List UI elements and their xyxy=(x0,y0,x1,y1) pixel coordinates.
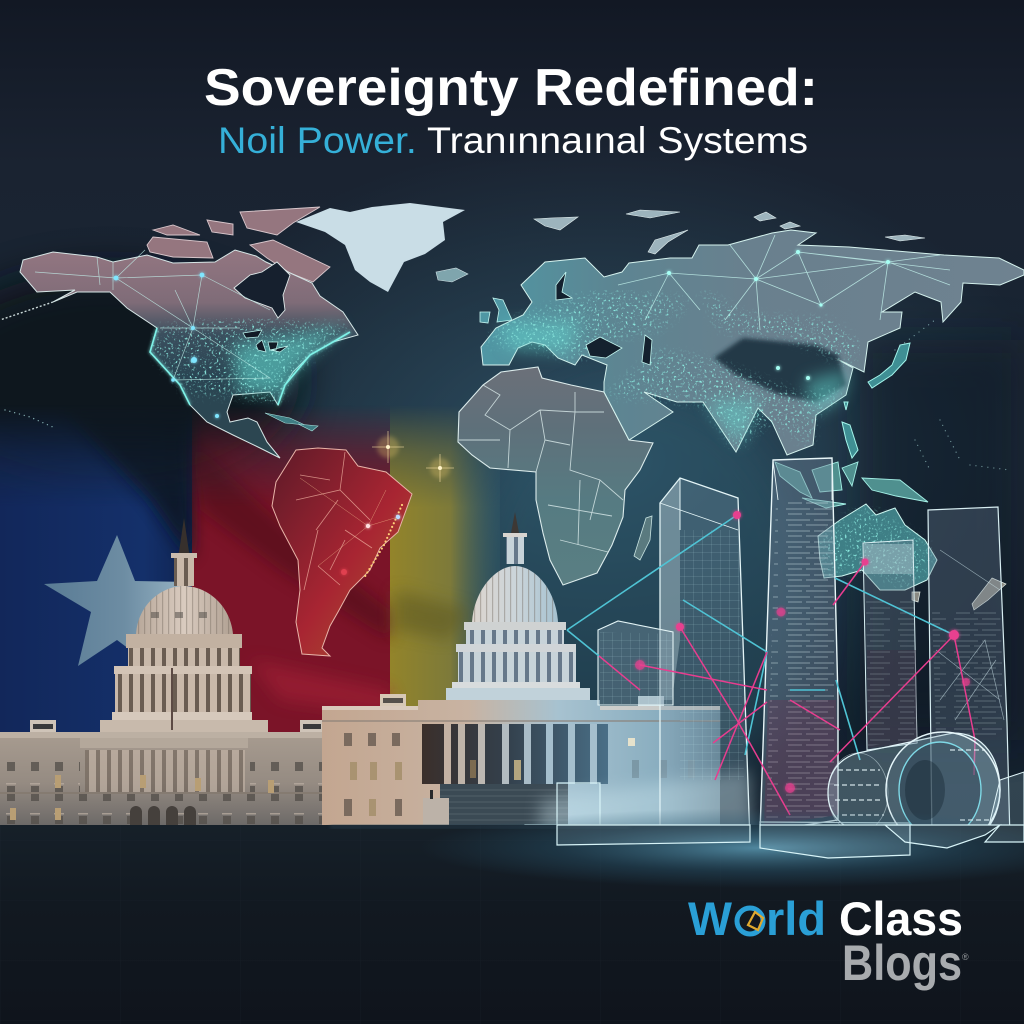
map: South America borders and lights xyxy=(296,452,402,590)
tower: short left xyxy=(598,621,673,705)
map: North America nodes xyxy=(114,273,219,418)
map: Australia xyxy=(818,504,937,590)
right capitol drum xyxy=(446,622,590,702)
map: North American coast glow xyxy=(150,328,350,405)
logo icon: ring with knot xyxy=(737,908,763,934)
title line 1: Sovereignty Redefined: xyxy=(204,59,818,117)
tower: rear centre xyxy=(863,540,917,750)
title line 2: Noil Power. Tranınnaınal Systems xyxy=(218,120,808,161)
roof pavilion xyxy=(380,694,664,706)
map: Greenland xyxy=(296,203,465,292)
left wing arches xyxy=(130,806,196,825)
right capitol statue xyxy=(508,512,522,536)
map: North America city lights xyxy=(150,318,350,405)
left capitol statue xyxy=(176,518,192,556)
map: Japan and Philippines xyxy=(842,343,910,458)
map: Africa xyxy=(458,367,653,585)
map: North America network xyxy=(35,250,270,380)
right capitol lantern xyxy=(503,533,527,564)
map: Eurasia xyxy=(481,230,1024,455)
map: Eurasia network xyxy=(618,235,950,330)
map: Hawaii island dots xyxy=(5,410,55,428)
far right glass cylinder xyxy=(985,772,1024,842)
map: US east glow xyxy=(232,325,345,395)
left capitol dome xyxy=(136,586,233,634)
map: Africa country borders xyxy=(459,385,623,552)
flag star xyxy=(44,535,182,666)
map: Aleutian chain xyxy=(0,302,53,320)
map: Eurasia nodes xyxy=(667,250,890,380)
map: Hudson Bay xyxy=(234,262,290,318)
lower hologram haze xyxy=(540,770,755,846)
map: South America sparkles xyxy=(341,431,454,575)
logo word: rld: rld xyxy=(766,892,826,945)
map: UK and Ireland xyxy=(480,298,512,323)
network lines: cyan xyxy=(567,515,954,760)
right wing body xyxy=(322,700,720,825)
left capitol flag pole xyxy=(171,668,173,730)
glass bases over floor xyxy=(557,825,1024,858)
map: Tibet dark region xyxy=(714,338,846,402)
map: North America xyxy=(20,250,358,458)
base glow xyxy=(530,834,1024,846)
map: Madagascar xyxy=(634,516,652,560)
holographic glass towers xyxy=(525,458,1024,858)
map: New Zealand and Tasmania xyxy=(912,578,1006,610)
logo word: W: W xyxy=(688,892,733,945)
flag: blue field xyxy=(0,405,192,740)
map: Caribbean islands xyxy=(265,413,318,431)
glass cylinder xyxy=(828,732,1000,848)
floor xyxy=(0,808,1024,1024)
logo registered mark: ® xyxy=(962,952,969,962)
network nodes xyxy=(635,511,970,793)
map: Canadian arctic islands xyxy=(147,207,330,282)
map: Australia city lights xyxy=(820,506,935,588)
title xyxy=(204,59,818,161)
capitol building: right wing and dome xyxy=(322,512,720,825)
front steps xyxy=(423,784,568,825)
tower: rear right with map overlay xyxy=(928,507,1010,840)
flag backdrop xyxy=(0,405,500,740)
small roof pavilions xyxy=(30,720,324,732)
tower: tall centre with data xyxy=(760,458,838,832)
flag: red band xyxy=(192,405,390,740)
right capitol dome xyxy=(472,566,558,622)
map: Iceland xyxy=(436,268,468,282)
network lines: magenta xyxy=(599,562,975,815)
map: Baltic, Black and Caspian seas xyxy=(556,272,652,365)
glass base box centre xyxy=(760,822,910,858)
right wing windows xyxy=(344,733,695,816)
left wing body xyxy=(0,732,326,825)
left wing lit windows xyxy=(10,775,274,820)
flag: yellow band xyxy=(390,412,498,706)
flag: shadow folds xyxy=(82,418,468,708)
logo: World Class Blogs xyxy=(688,892,969,991)
glass base boxes left xyxy=(525,783,750,845)
logo word: Blogs: Blogs xyxy=(842,935,962,991)
left capitol lantern xyxy=(171,553,197,586)
logo word: Class: Class xyxy=(839,892,963,945)
left capitol drum xyxy=(100,634,268,732)
map: South America xyxy=(272,448,412,656)
tower: tall left xyxy=(660,478,750,845)
map: Pacific island dots xyxy=(895,320,1010,470)
map: Eurasia city lights xyxy=(485,290,860,450)
map: Great Lakes xyxy=(243,330,288,352)
world map xyxy=(0,203,1024,656)
map: Europe and India glow xyxy=(500,320,850,445)
map: Arctic islands xyxy=(534,210,925,254)
map: Indonesia islands xyxy=(775,462,928,508)
right wing colonnade xyxy=(422,724,608,784)
capitol building: left wing and dome xyxy=(0,518,326,825)
